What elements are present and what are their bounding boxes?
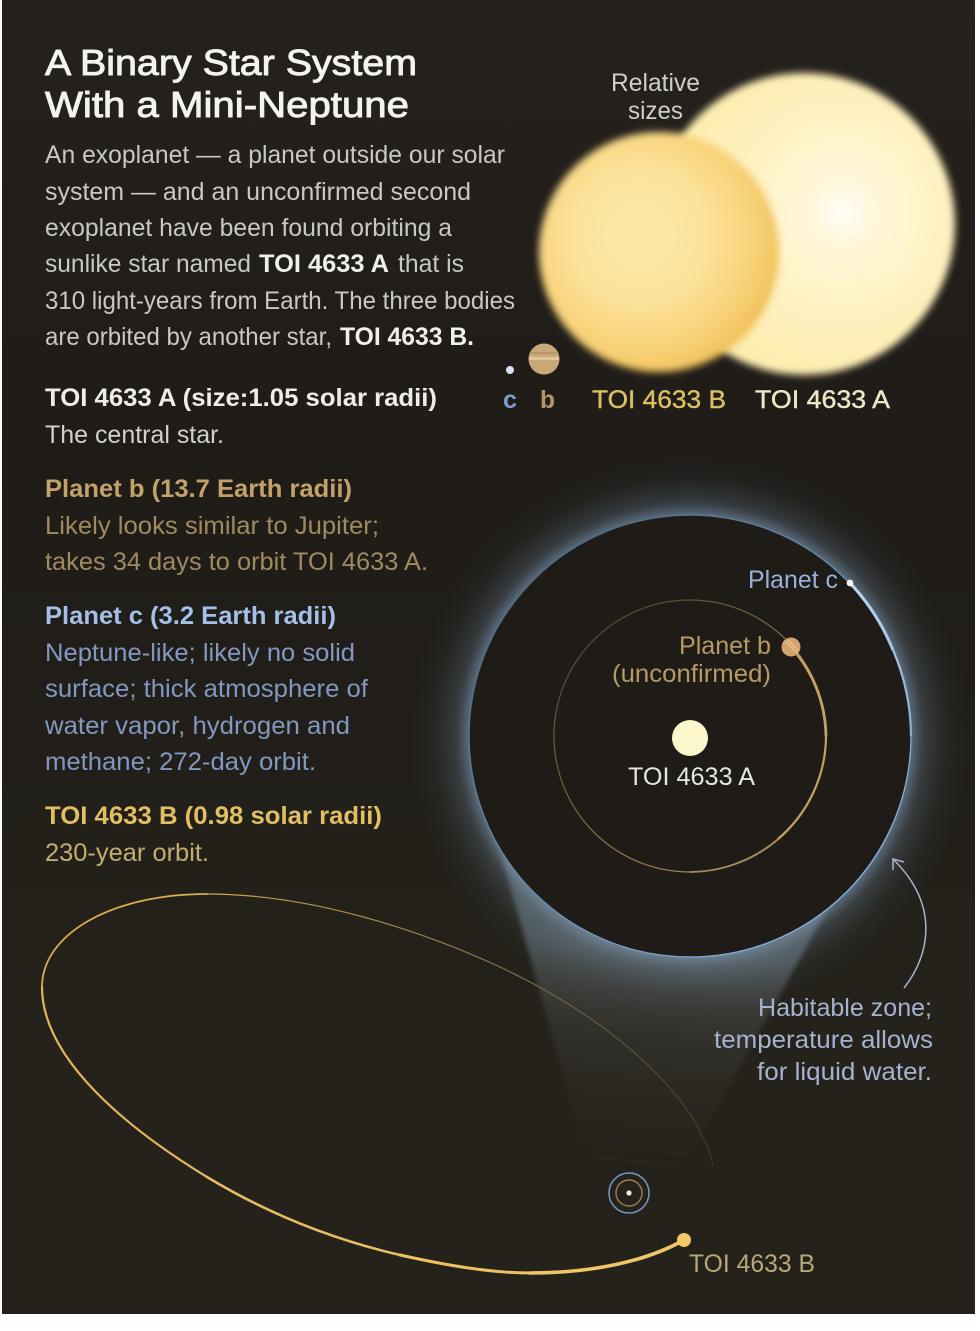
icon: planet c relative size (506, 366, 514, 374)
size labels: b (540, 386, 555, 414)
text block: TOI 4633 A: TOI 4633 A (size:1.05 solar radii) (45, 384, 437, 412)
planet b (782, 638, 800, 656)
icon: planet b relative size (528, 344, 560, 374)
label: relative sizes: sizes (628, 97, 683, 125)
orbit of TOI 4633 B (42, 894, 713, 1273)
star: TOI 4633 B relative size (539, 132, 779, 372)
label: relative sizes: Relative (611, 69, 700, 97)
title: With a Mini-Neptune (45, 84, 409, 125)
text block: TOI 4633 B (45, 802, 382, 867)
habitable zone glow (408, 454, 972, 1018)
text block: planet c: Planet c (3.2 Earth radii) (45, 602, 336, 630)
label: TOI 4633 A: TOI 4633 A (628, 763, 755, 791)
intro text: 310 light-years from Earth. The three bodies (45, 287, 515, 315)
planet b orbit highlight (690, 647, 826, 872)
label: habitable zone: temperature allows (714, 1026, 933, 1054)
star: TOI 4633 A relative size (653, 73, 955, 375)
size labels: c (503, 386, 517, 414)
text block: planet b (45, 475, 428, 576)
star TOI 4633 A (672, 720, 708, 756)
label: TOI 4633 B on orbit: TOI 4633 B (689, 1250, 815, 1278)
text block: planet c: Neptune-like; likely no solid (45, 639, 355, 667)
text block: planet c (44, 602, 368, 776)
label: habitable zone (714, 994, 933, 1086)
arrow: habitable zone pointer (893, 859, 926, 988)
text block: TOI 4633 B: 230-year orbit. (45, 839, 209, 867)
intro text: TOI 4633 A (259, 250, 389, 278)
text block: TOI 4633 A (45, 384, 437, 449)
intro text: sunlike star named (45, 250, 251, 278)
size labels: TOI 4633 B (592, 386, 726, 414)
text block: TOI 4633 B: TOI 4633 B (0.98 solar radii) (45, 802, 382, 830)
title (45, 42, 417, 125)
intro text: are orbited by another star, (45, 323, 332, 351)
intro text: An exoplanet — a planet outside our solar (45, 141, 505, 169)
intro text: TOI 4633 B. (340, 323, 474, 351)
text block: planet c: water vapor, hydrogen and (44, 712, 350, 740)
planet b orbit (554, 600, 826, 872)
size labels: TOI 4633 A (755, 386, 890, 414)
label: planet b: Planet b (679, 632, 771, 660)
orbit diagram: inner system (469, 515, 911, 957)
intro text: that is (398, 250, 464, 278)
text block: planet c: surface; thick atmosphere of (45, 675, 368, 703)
planet c (847, 580, 853, 586)
size labels (503, 386, 890, 414)
label: habitable zone: Habitable zone; (758, 994, 932, 1022)
text block: TOI 4633 A: The central star. (45, 421, 224, 449)
icon: miniature system (609, 1173, 649, 1213)
star: TOI 4633 B on orbit (677, 1233, 691, 1247)
label: relative sizes (611, 69, 700, 125)
text block: planet c: methane; 272-day orbit. (45, 748, 316, 776)
label: planet b: (unconfirmed) (612, 660, 771, 688)
text block: planet b: Planet b (13.7 Earth radii) (45, 475, 352, 503)
intro text: system — and an unconfirmed second (45, 178, 471, 206)
text block: planet b: takes 34 days to orbit TOI 4633 A. (45, 548, 428, 576)
title: A Binary Star System (45, 42, 417, 83)
intro text (45, 141, 515, 351)
label: planet c: Planet c (748, 566, 838, 594)
label: planet b (612, 632, 771, 688)
planet c orbit highlight (850, 583, 911, 736)
habitable zone disc (469, 515, 911, 957)
text block: planet b: Likely looks similar to Jupiter; (45, 512, 379, 540)
intro text: exoplanet have been found orbiting a (45, 214, 452, 242)
view cone from system to enlargement (486, 800, 835, 1190)
label: habitable zone: for liquid water. (757, 1058, 932, 1086)
